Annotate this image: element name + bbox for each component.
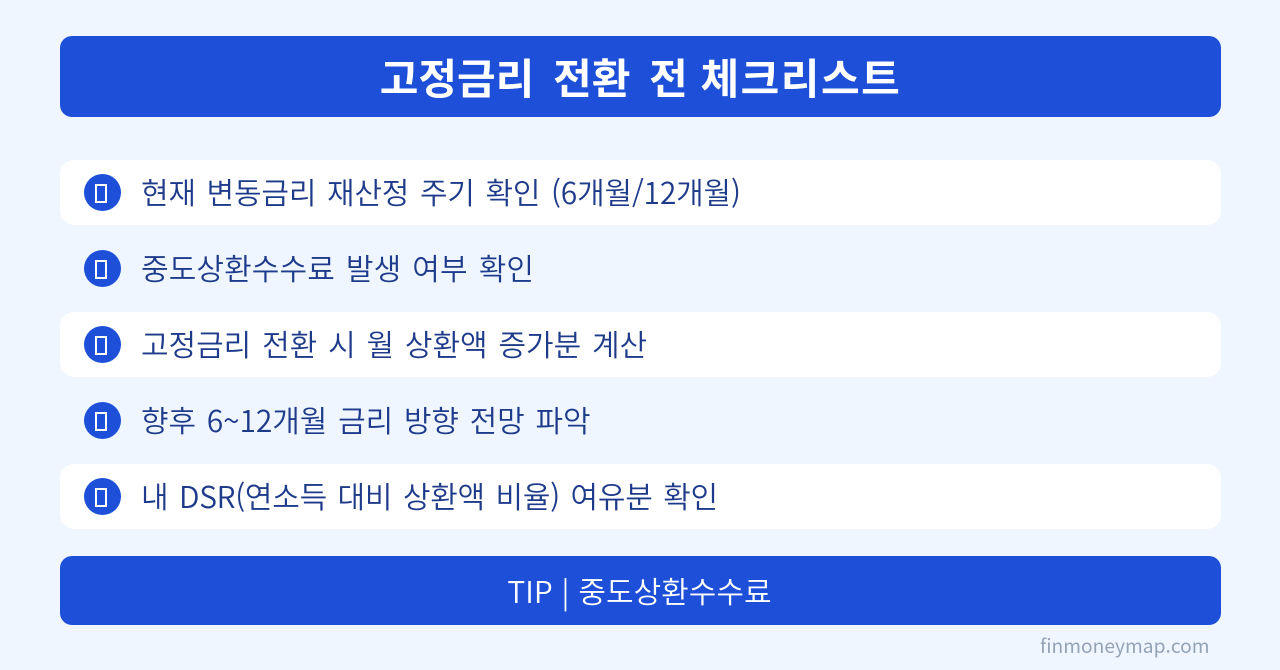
title [60,36,1221,117]
item 4 text: 향후 6~12개월 금리 방향 전망 파악 [141,397,590,441]
checklist item 2 [84,245,534,289]
item 1 text: 현재 변동금리 재산정 주기 확인 (6개월/12개월) [141,169,741,213]
title: 고정금리 전환 전 체크리스트 [380,46,901,107]
checklist item 4 [84,397,590,441]
icon: item 2 bullet [84,250,121,287]
tip banner: TIP | 중도상환수수료 [507,568,772,612]
checklist item 1 [60,160,1221,225]
icon: item 1 bullet [84,174,121,211]
icon: item 3 bullet [84,326,121,363]
item 2 text: 중도상환수수료 발생 여부 확인 [141,245,534,289]
icon: item 4 bullet [84,402,121,439]
tip banner [60,556,1221,625]
checklist item 3 [60,312,1221,377]
item 3 text: 고정금리 전환 시 월 상환액 증가분 계산 [141,321,647,365]
checklist item 5 [60,464,1221,529]
footer website: finmoneymap.com [1040,631,1210,659]
icon: item 5 bullet [84,478,121,515]
item 5 text: 내 DSR(연소득 대비 상환액 비율) 여유분 확인 [141,473,718,517]
